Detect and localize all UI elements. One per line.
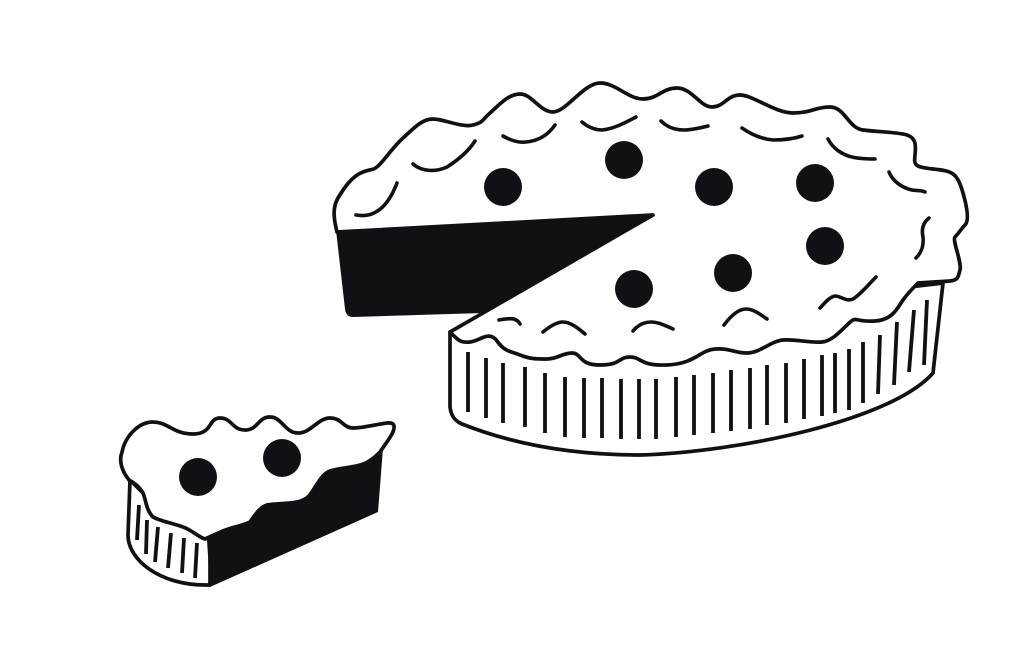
- slice blueberry dots: [179, 439, 301, 496]
- blueberry dots: [484, 141, 844, 308]
- tin flute ticks: [468, 300, 927, 439]
- pie tin side wall: [450, 283, 943, 455]
- dark cut-out wedge: [336, 215, 653, 317]
- slice ticks: [137, 505, 197, 578]
- slice tin wall: [128, 480, 210, 585]
- pie slice: [121, 417, 394, 587]
- crust squiggles: [356, 117, 929, 334]
- whole pie: [334, 83, 967, 455]
- slice dark filling: [207, 448, 383, 587]
- pie top crust: [334, 83, 967, 365]
- slice top crust: [121, 417, 394, 539]
